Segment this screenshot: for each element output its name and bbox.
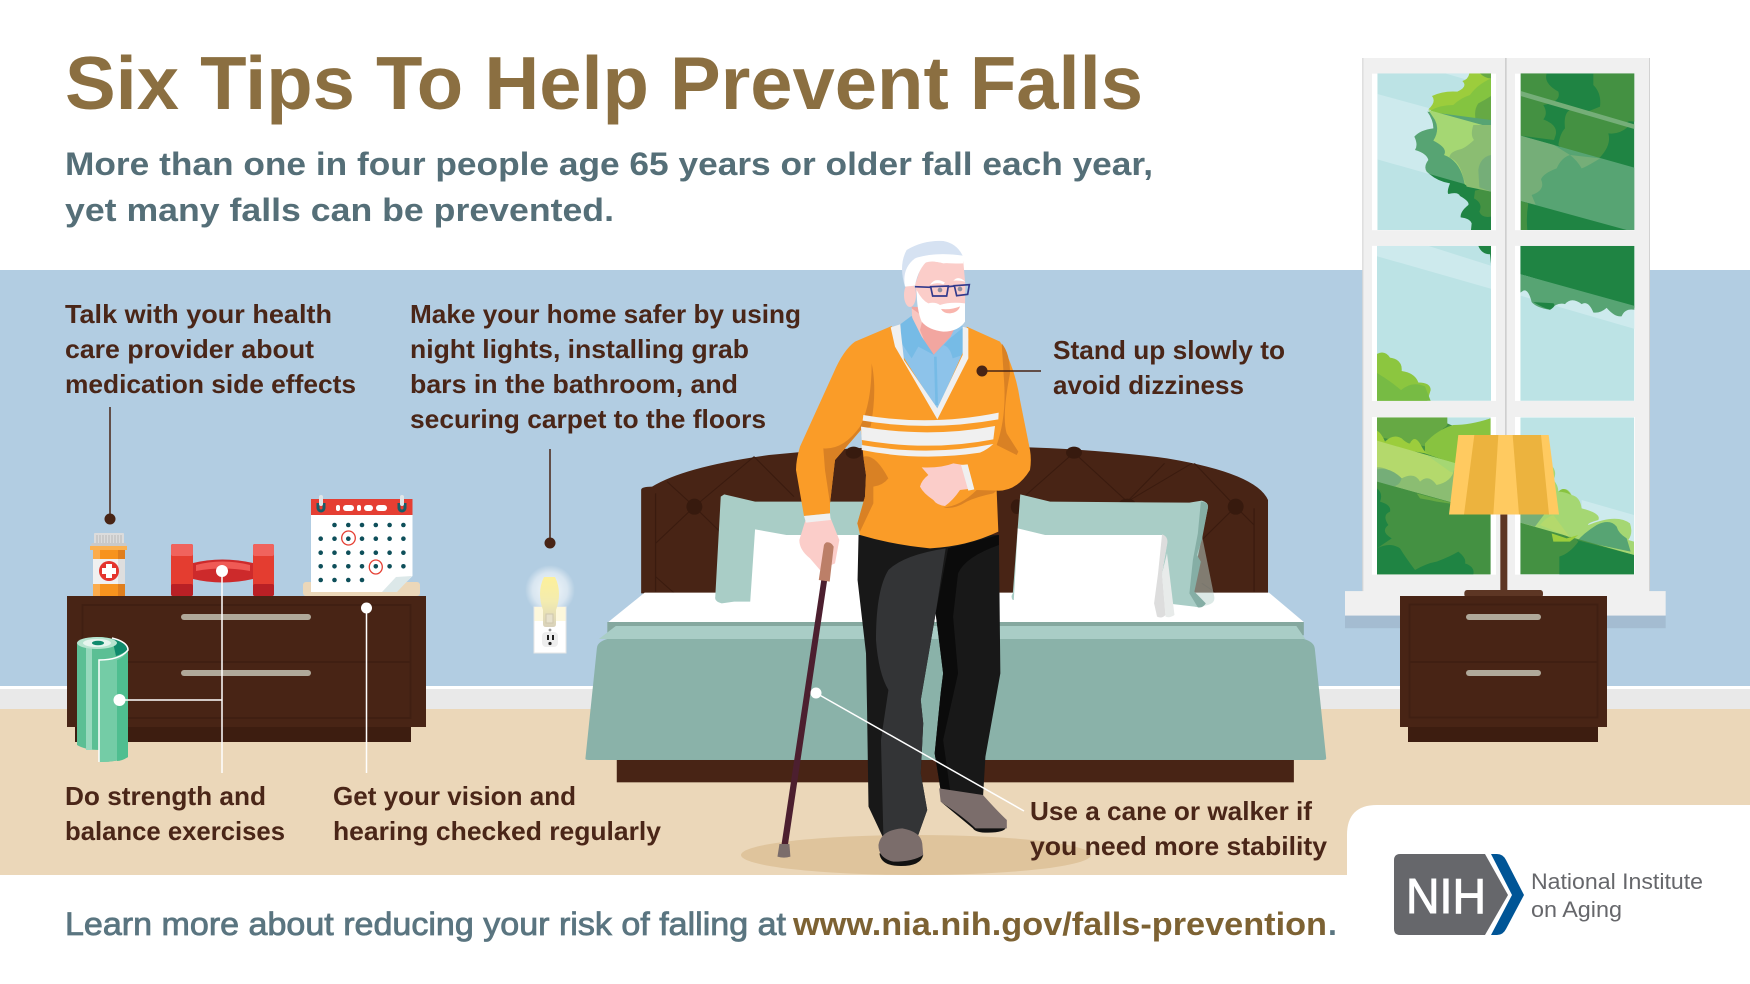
tip: strength and balance: Do strength and — [65, 781, 266, 811]
legs and shoes — [858, 535, 1007, 866]
footer call to action: . — [1328, 906, 1337, 942]
pane: middle left — [1377, 246, 1491, 401]
pillows: right — [1012, 494, 1214, 618]
tip: medication — [65, 299, 356, 524]
left dresser — [67, 596, 426, 742]
bed — [585, 446, 1326, 782]
tip: vision and hearing — [333, 602, 662, 846]
tip: home safety: Make your home safer by using — [410, 299, 801, 329]
tip: cane or walker: Use a cane or walker if — [1030, 796, 1312, 826]
bed sheet band — [599, 622, 1305, 639]
tip: medication: medication side effects — [65, 369, 356, 399]
tip: stand up slowly: avoid dizziness — [1053, 370, 1244, 400]
NIH logo: NIH — [1406, 870, 1486, 924]
NIH logo — [1394, 854, 1703, 935]
pane: top right — [1521, 73, 1634, 230]
icon: calendar — [303, 495, 420, 596]
pane: middle right — [1520, 246, 1635, 401]
pillows: left — [715, 494, 869, 603]
tip: home safety: securing carpet to the floors — [410, 404, 766, 434]
right nightstand — [1400, 596, 1607, 742]
tip: vision and hearing: hearing checked regularly — [333, 816, 662, 846]
leader line — [361, 602, 372, 773]
title: Six Tips To Help Prevent Falls — [65, 41, 1143, 125]
upper body — [796, 241, 1031, 570]
tip: home safety: night lights, installing grab — [410, 334, 749, 364]
glasses — [915, 285, 969, 296]
sweater stripes — [861, 413, 999, 457]
sweater — [796, 326, 1031, 548]
man — [777, 241, 1031, 866]
tip: stand up slowly: Stand up slowly to — [1053, 335, 1285, 365]
tip: stand up slowly — [976, 335, 1285, 400]
drawer handles — [181, 614, 311, 676]
left hand — [799, 513, 839, 570]
subtitle — [65, 146, 1153, 228]
sweater collar — [891, 324, 968, 419]
bed frame — [617, 760, 1294, 782]
window frame — [1362, 58, 1650, 592]
footer white corner panel — [1347, 805, 1750, 875]
window — [1345, 58, 1666, 628]
tip: home safety: bars in the bathroom, and — [410, 369, 738, 399]
tip: strength and balance — [65, 565, 285, 846]
tip: medication: care provider about — [65, 334, 314, 364]
footer call to action: Learn more about reducing your risk of falling at — [65, 906, 786, 942]
tip: medication: Talk with your health — [65, 299, 332, 329]
icon: pill bottle — [90, 533, 127, 596]
right hand — [920, 463, 974, 506]
blanket — [585, 639, 1326, 760]
leader line — [104, 407, 116, 524]
neck and shirt — [898, 307, 963, 408]
sweater shading — [823, 343, 1018, 532]
calendar dots — [318, 523, 406, 582]
leader lines — [114, 565, 228, 773]
room background — [0, 270, 1750, 875]
mattress — [608, 593, 1304, 622]
floor shadow — [741, 835, 1091, 875]
window sill — [1345, 591, 1666, 628]
tip: strength and balance: balance exercises — [65, 816, 285, 846]
NIH logo: National Institute — [1531, 869, 1703, 894]
footer call to action — [65, 906, 1337, 942]
icon: exercise mat — [77, 637, 128, 762]
tip: home safety — [410, 299, 801, 548]
table lamp — [1449, 435, 1559, 598]
subtitle: More than one in four people age 65 years or older fall each year, — [65, 146, 1153, 182]
leader line — [810, 688, 1024, 811]
leader line — [544, 449, 556, 548]
icon: night light — [525, 565, 575, 653]
tip: vision and hearing: Get your vision and — [333, 781, 576, 811]
icon: dumbbell — [171, 544, 274, 596]
pane: top left — [1377, 73, 1491, 230]
NIH logo: on Aging — [1531, 897, 1622, 922]
cane — [777, 542, 834, 858]
head — [902, 241, 969, 332]
leader line — [976, 366, 1041, 376]
headboard — [641, 446, 1268, 593]
tip: cane or walker: you need more stability — [1030, 831, 1328, 861]
pane: bottom left — [1377, 417, 1491, 574]
pane: bottom right — [1520, 417, 1634, 574]
tip: cane or walker — [810, 688, 1328, 861]
circled dates — [342, 531, 382, 574]
footer call to action: www.nia.nih.gov/falls-prevention — [792, 906, 1327, 942]
subtitle: yet many falls can be prevented. — [65, 192, 614, 228]
